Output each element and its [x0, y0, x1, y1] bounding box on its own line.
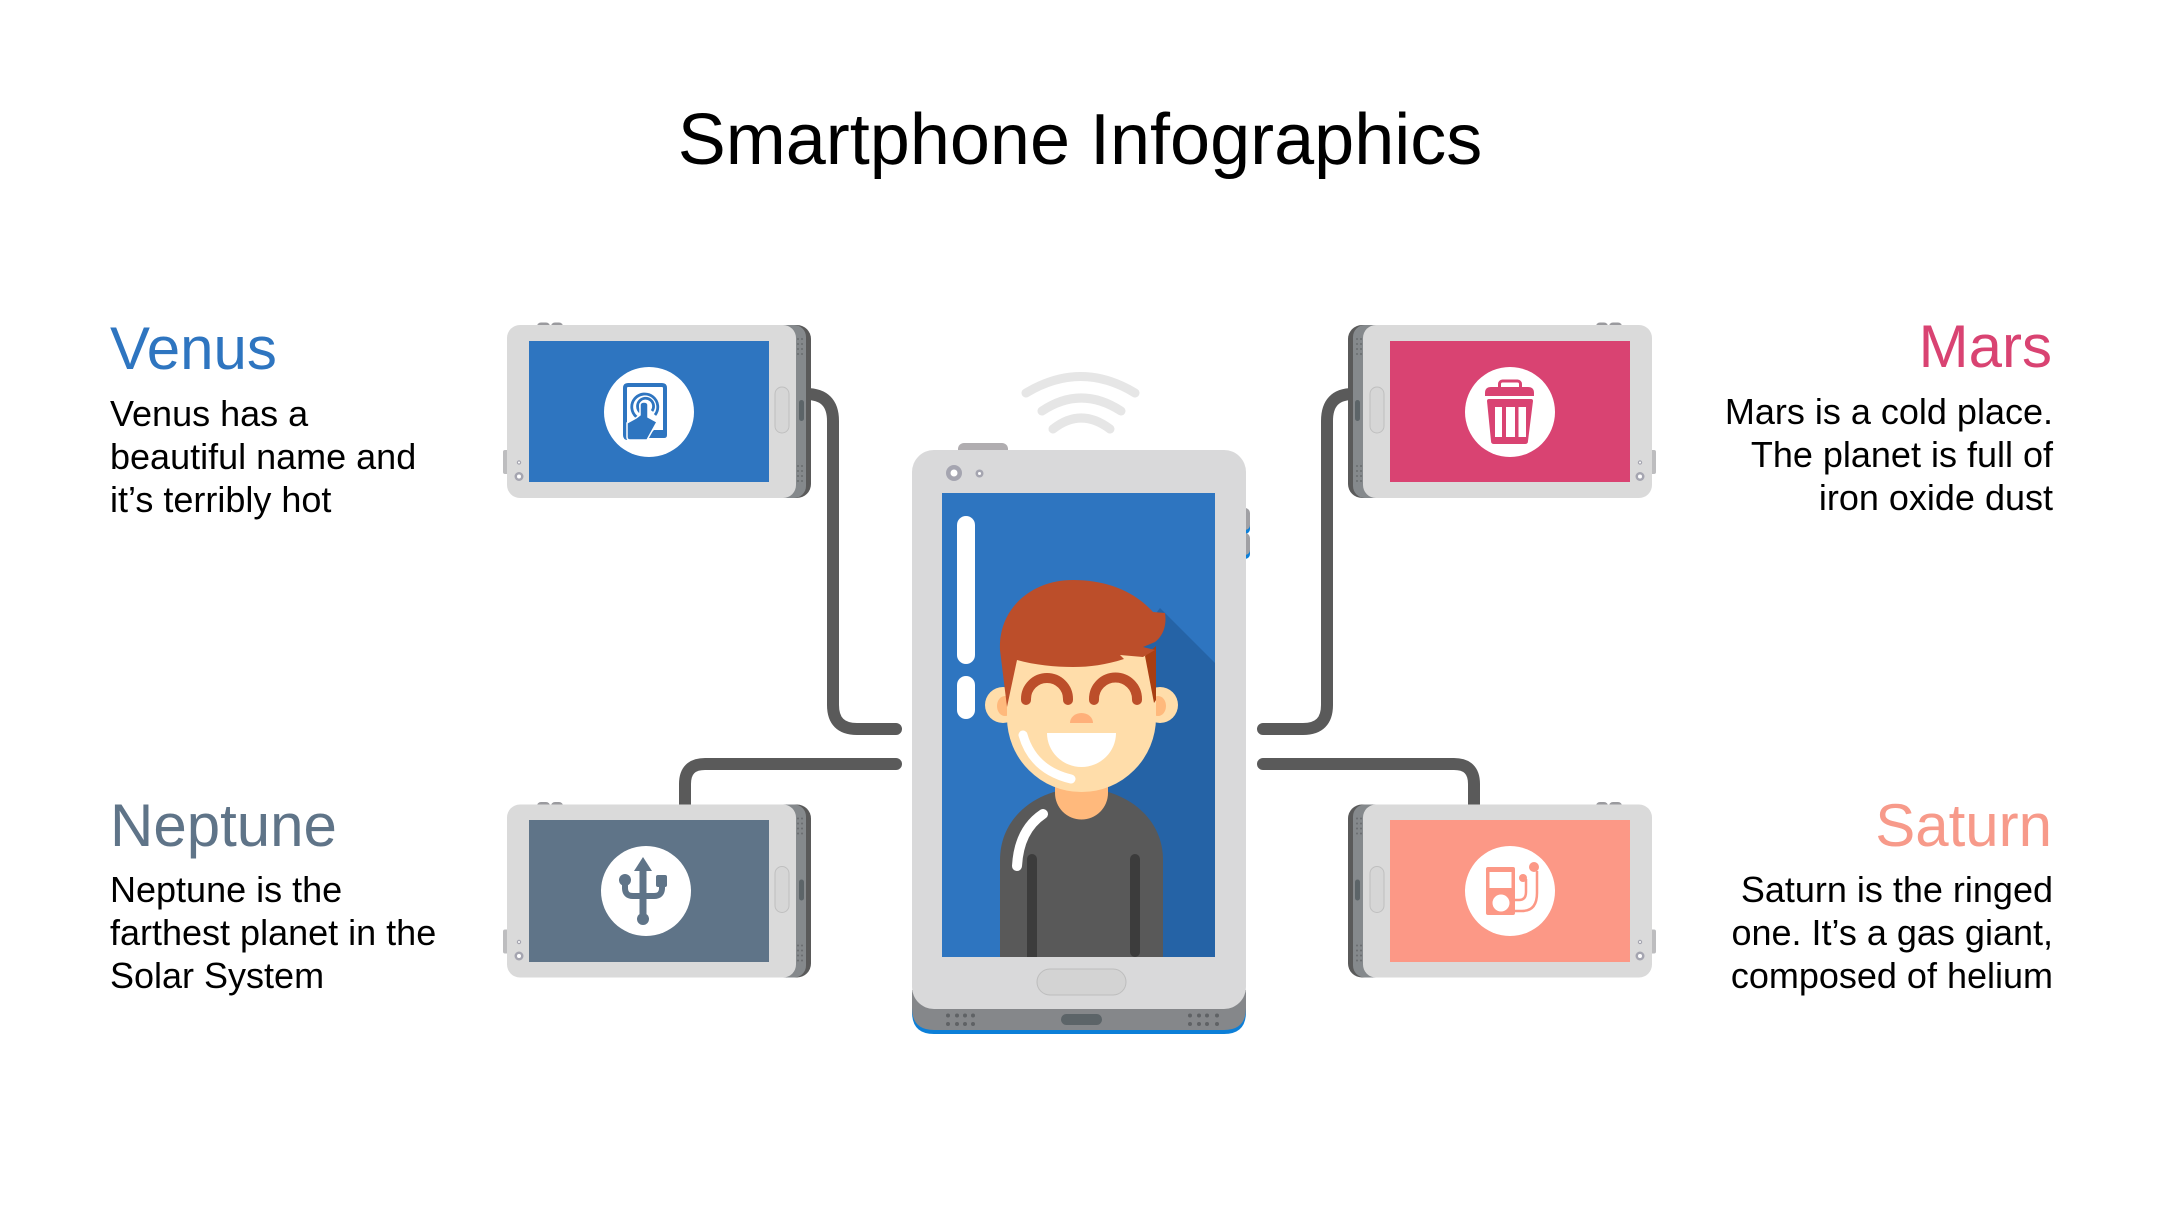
Saturn description: composed of helium [1731, 955, 2053, 996]
Venus description: beautiful name and [110, 436, 416, 477]
screen glare [957, 516, 975, 719]
home button [1037, 969, 1126, 995]
Venus heading: Venus [110, 315, 277, 382]
character [985, 580, 1178, 957]
panel: Mars [1725, 313, 2054, 518]
nose [1070, 713, 1093, 723]
Saturn heading: Saturn [1875, 792, 2052, 859]
camera [946, 465, 984, 481]
Venus description: it’s terribly hot [110, 479, 331, 520]
panel: Venus [110, 315, 416, 520]
icon: wifi signal [1026, 376, 1135, 429]
body [1000, 788, 1163, 957]
hair [1000, 580, 1166, 707]
side phone: Venus [503, 322, 811, 498]
screen [942, 493, 1215, 957]
icon: USB [619, 857, 667, 925]
connector: Neptune [685, 764, 896, 806]
Venus description: Venus has a [110, 393, 309, 434]
phone bottom edge [912, 990, 1246, 1034]
panel: Neptune [110, 792, 436, 996]
Neptune description: Neptune is the [110, 869, 342, 910]
mouth [1047, 733, 1116, 767]
long shadow [1090, 608, 1215, 957]
eyes [1026, 678, 1137, 700]
Mars description: The planet is full of [1751, 434, 2054, 475]
neck [1055, 780, 1108, 820]
side phone: Neptune [503, 802, 811, 978]
connector: Mars [1263, 394, 1353, 729]
connector: Venus [806, 394, 896, 729]
Neptune description: farthest planet in the [110, 912, 436, 953]
icon: trash can [1485, 381, 1534, 444]
phone buttons [958, 443, 1250, 559]
Neptune description: Solar System [110, 955, 324, 996]
connector: Saturn [1263, 764, 1474, 806]
side phone: Saturn [1348, 802, 1656, 978]
ears [985, 687, 1178, 723]
main phone [912, 443, 1250, 1034]
face highlight [1023, 735, 1071, 779]
icon: touch tablet [625, 385, 667, 440]
side phone: Mars [1348, 322, 1656, 498]
Saturn description: one. It’s a gas giant, [1731, 912, 2053, 953]
title: Smartphone Infographics [678, 100, 1482, 180]
Mars description: Mars is a cold place. [1725, 391, 2053, 432]
Mars description: iron oxide dust [1819, 477, 2053, 518]
Mars heading: Mars [1919, 313, 2052, 380]
phone face [912, 450, 1246, 1009]
face [1007, 655, 1156, 792]
Neptune heading: Neptune [110, 792, 337, 859]
Saturn description: Saturn is the ringed [1741, 869, 2053, 910]
icon: music player [1486, 862, 1539, 915]
panel: Saturn [1731, 792, 2053, 996]
